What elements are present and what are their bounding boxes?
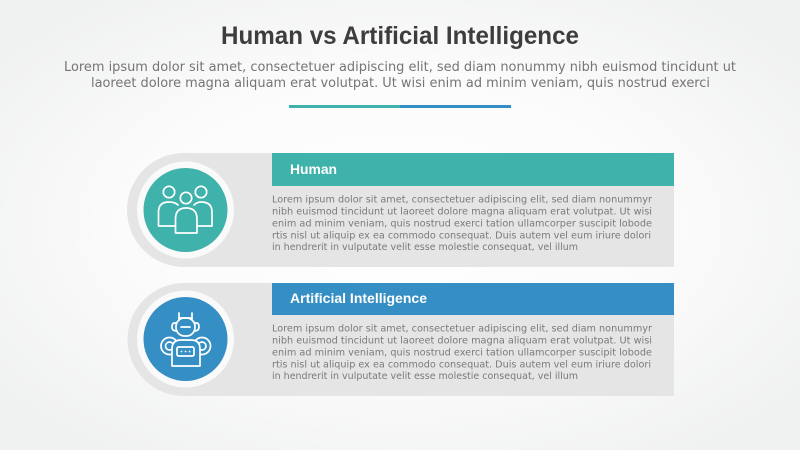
body text: human: enim ad minim veniam, quis nostrud exerci tation ullamcorper suscipit lobode [272, 218, 652, 230]
title: Human vs Artificial Intelligence [221, 22, 579, 50]
body text: artificial intelligence: rtis nisl ut aliquip ex ea commodo consequat. Duis autem vel eum iriure dolori [272, 360, 651, 370]
header bar: human [272, 153, 674, 186]
body text: human [272, 194, 652, 253]
subtitle text block: Lorem ipsum dolor sit amet, consectetuer adipiscing elit, sed diam nonummy nibh euismod tincidunt ut [64, 60, 736, 75]
panel background: artificial intelligence [127, 283, 674, 396]
body text: artificial intelligence [272, 324, 652, 382]
panel background: human [127, 153, 674, 267]
panel: artificial intelligence [127, 283, 674, 396]
subtitle text block: laoreet dolore magna aliquam erat volutpat. Ut wisi enim ad minim veniam, quis nostrud exerci [91, 76, 710, 91]
body text: artificial intelligence: enim ad minim veniam, quis nostrud exerci tation ullamcorper suscipit lobode [272, 348, 652, 358]
icon: robot [137, 290, 234, 388]
body text: human: Lorem ipsum dolor sit amet, consectetuer adipiscing elit, sed diam nonummyr [272, 194, 652, 206]
header bar: artificial intelligence: Artificial Intelligence [290, 290, 427, 306]
body text: artificial intelligence: Lorem ipsum dolor sit amet, consectetuer adipiscing elit, sed diam nonummyr [272, 324, 652, 334]
header bar: artificial intelligence [272, 283, 674, 315]
subtitle text block [64, 60, 736, 91]
icon: people group [137, 162, 234, 258]
body text: artificial intelligence: nibh euismod tincidunt ut laoreet dolore magna aliquam erat volutpat. Ut wisi [272, 336, 652, 346]
body text: artificial intelligence: in hendrerit in vulputate velit esse molestie consequat, vel illum [272, 371, 578, 382]
panel: human [127, 153, 674, 267]
body text: human: in hendrerit in vulputate velit esse molestie consequat, vel illum [272, 242, 578, 253]
body text: human: nibh euismod tincidunt ut laoreet dolore magna aliquam erat volutpat. Ut wisi [272, 206, 652, 218]
header bar: human: Human [290, 161, 337, 177]
title divider [289, 105, 511, 108]
body text: human: rtis nisl ut aliquip ex ea commodo consequat. Duis autem vel eum iriure dolori [272, 230, 651, 242]
